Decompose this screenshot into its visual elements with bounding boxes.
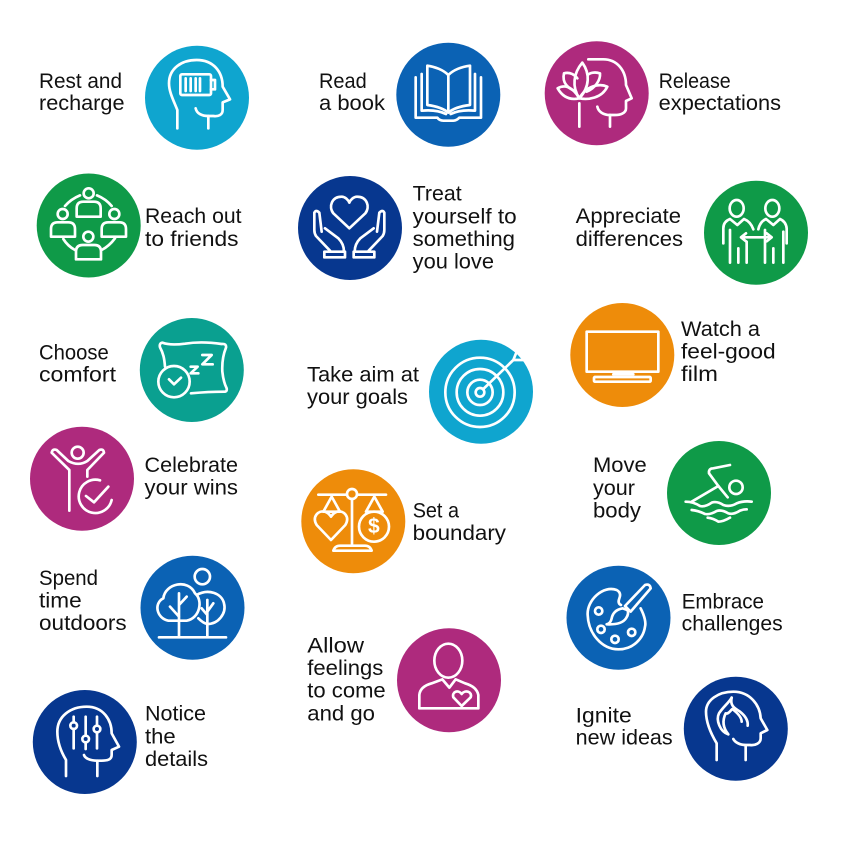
icon: pillow and clock — [140, 318, 244, 422]
icon: head with sliders — [33, 690, 137, 794]
label: Spend time outdoors: outdoors — [39, 612, 127, 635]
icon: swimmer — [667, 441, 771, 545]
icon: person with check mark — [30, 427, 134, 531]
icon: head with flame — [684, 677, 788, 781]
label: Take aim at your goals — [307, 364, 419, 409]
label: Choose comfort — [39, 341, 116, 387]
icon: trees and sun — [140, 556, 244, 660]
item: Release expectations — [545, 41, 781, 145]
item: Spend time outdoors — [39, 556, 244, 660]
label: Appreciate differences: differences — [576, 228, 683, 251]
label: Spend time outdoors — [39, 567, 127, 635]
icon: hands holding heart — [298, 176, 402, 280]
label: Treat yourself to something you love: yourself to — [413, 205, 517, 228]
label: Treat yourself to something you love: you love — [413, 251, 494, 274]
label: Notice the details — [145, 703, 208, 771]
label: Rest and recharge: recharge — [39, 92, 124, 115]
label: Release expectations — [659, 70, 781, 115]
label: Celebrate your wins: Celebrate — [144, 454, 238, 477]
icon: lotus and head — [545, 41, 649, 145]
label: Take aim at your goals: Take aim at — [307, 364, 419, 387]
label: Move your body: your — [593, 477, 635, 500]
label: Take aim at your goals: your goals — [307, 386, 408, 409]
label: Rest and recharge — [39, 70, 124, 115]
icon: person with heart — [397, 628, 501, 732]
label: Rest and recharge: Rest and — [39, 70, 122, 93]
label: Reach out to friends: Reach out — [145, 205, 242, 228]
item: Ignite new ideas — [576, 677, 788, 781]
item: Treat yourself to something you love — [298, 176, 517, 280]
label: Treat yourself to something you love: something — [413, 228, 515, 251]
label: Set a boundary — [413, 499, 507, 545]
label: Celebrate your wins — [144, 454, 238, 500]
label: Appreciate differences: Appreciate — [576, 205, 681, 228]
label: Embrace challenges: challenges — [682, 612, 783, 636]
label: Set a boundary: Set a — [413, 499, 459, 522]
item: Allow feelings to come and go — [307, 628, 501, 732]
label: Read a book: a book — [319, 92, 386, 115]
label: Allow feelings to come and go — [307, 634, 386, 726]
item: Read a book — [319, 43, 500, 147]
icon: head with battery — [145, 46, 249, 150]
label: Release expectations: expectations — [659, 92, 781, 115]
label: Watch a feel-good film: Watch a — [681, 318, 760, 341]
item: Set a boundary — [301, 469, 507, 573]
icon: palette and brush — [566, 566, 670, 670]
item: Watch a feel-good film — [570, 303, 776, 407]
item: Embrace challenges — [566, 566, 783, 670]
label: Spend time outdoors: Spend — [39, 567, 98, 590]
icon: circle of friends — [37, 174, 141, 278]
label: Move your body: Move — [593, 454, 647, 477]
label: Ignite new ideas — [576, 704, 673, 750]
item: Celebrate your wins — [30, 427, 238, 531]
label: Watch a feel-good film — [681, 318, 776, 386]
icon: scale with heart and coin — [301, 469, 405, 573]
label: Move your body: body — [593, 500, 642, 522]
label: Appreciate differences — [576, 205, 683, 251]
item: Appreciate differences — [576, 181, 808, 285]
label: Ignite new ideas: new ideas — [576, 726, 673, 750]
icon: television — [570, 303, 674, 407]
label: Choose comfort: comfort — [39, 364, 116, 387]
label: Watch a feel-good film: feel-good — [681, 341, 776, 364]
label: Move your body — [593, 454, 647, 522]
label: Allow feelings to come and go: Allow — [307, 634, 365, 657]
label: Celebrate your wins: your wins — [144, 477, 238, 500]
item: Rest and recharge — [39, 46, 249, 150]
label: Read a book — [319, 70, 386, 115]
icon: open book — [396, 43, 500, 147]
label: Ignite new ideas: Ignite — [576, 704, 632, 727]
label: Choose comfort: Choose — [39, 341, 109, 364]
label: Allow feelings to come and go: to come — [307, 680, 386, 703]
label: Embrace challenges — [682, 590, 783, 636]
label: Embrace challenges: Embrace — [682, 590, 764, 613]
icon: target with arrow — [429, 340, 533, 444]
label: Spend time outdoors: time — [39, 590, 82, 612]
label: Release expectations: Release — [659, 70, 731, 93]
label: Reach out to friends — [145, 205, 242, 251]
icon glyph: dollar sign: $ — [368, 515, 380, 538]
label: Allow feelings to come and go: and go — [307, 702, 375, 726]
label: Reach out to friends: to friends — [145, 228, 238, 251]
label: Treat yourself to something you love: Treat — [413, 183, 462, 206]
item: Reach out to friends — [37, 174, 242, 278]
label: Notice the details: details — [145, 748, 208, 771]
label: Notice the details: Notice — [145, 703, 206, 726]
label: Set a boundary: boundary — [413, 522, 507, 545]
label: Treat yourself to something you love — [413, 183, 517, 274]
label: Watch a feel-good film: film — [681, 363, 718, 386]
item: Move your body — [593, 441, 771, 545]
label: Notice the details: the — [145, 726, 176, 748]
label: Read a book: Read — [319, 70, 367, 93]
icon: two people with arrow — [704, 181, 808, 285]
item: Notice the details — [33, 690, 208, 794]
label: Allow feelings to come and go: feelings — [307, 657, 383, 680]
item: Take aim at your goals — [307, 340, 533, 444]
item: Choose comfort — [39, 318, 244, 422]
